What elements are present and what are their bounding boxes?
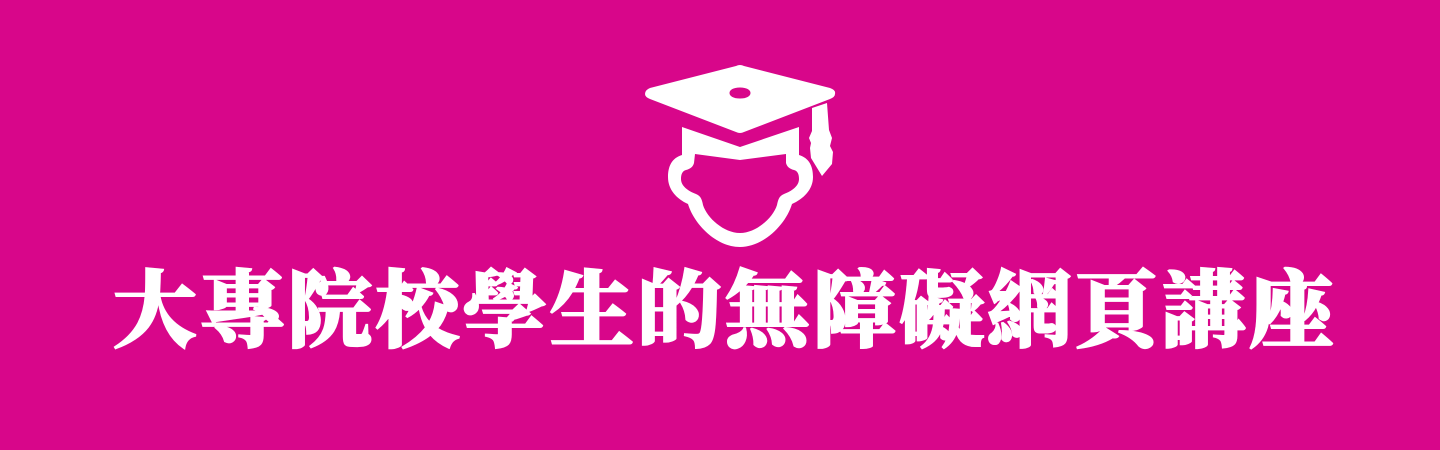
icon: tassel	[809, 103, 833, 176]
icon: face outline	[668, 127, 813, 247]
title: 大專院校學生的無障礙網頁講座	[113, 266, 1337, 359]
icon: mortarboard cap	[645, 65, 835, 133]
